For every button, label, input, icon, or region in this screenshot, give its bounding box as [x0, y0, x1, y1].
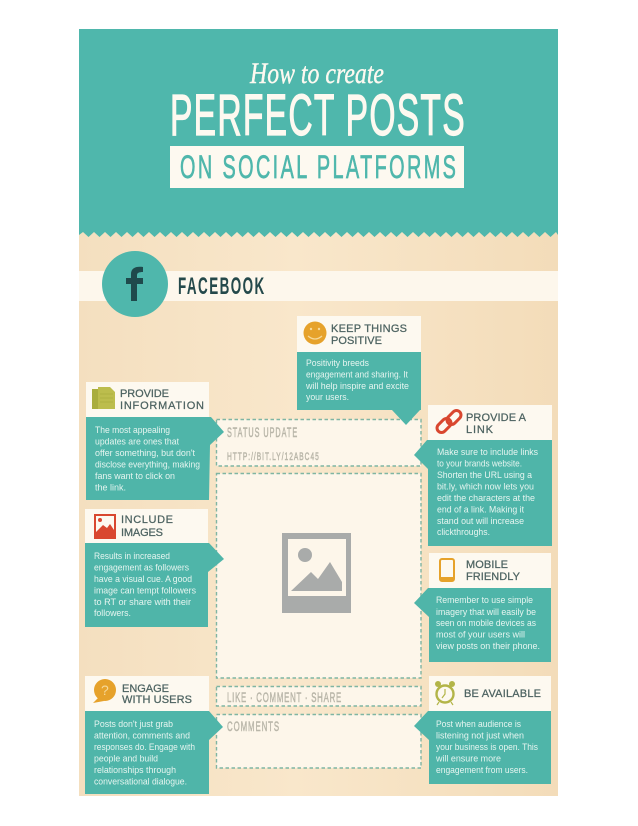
panel: provide a link: Make sure to include links: [437, 446, 538, 457]
panel: provide a link: edit the characters at the: [437, 492, 535, 503]
post mock: like comment share box: LIKE · COMMENT · SHARE: [227, 691, 342, 706]
panel: engage with users: people and build: [94, 752, 158, 764]
panel: be available: [414, 676, 551, 784]
panel: be available: your business is open. This: [436, 741, 538, 752]
panel: include images: to RT or share with their: [94, 596, 191, 607]
panel: provide a link: LINK: [466, 424, 494, 436]
panel: keep things positive: Positivity breeds: [306, 357, 369, 368]
panel: include images: [85, 509, 224, 627]
panel: mobile friendly: Remember to use simple: [436, 594, 533, 605]
panel: provide a link: clickthroughs.: [437, 526, 490, 537]
panel: mobile friendly: most of your users will: [436, 628, 525, 640]
facebook section heading: FACEBOOK: [178, 273, 264, 300]
panel: include images: Results in increased: [94, 550, 170, 561]
facebook section heading: [79, 251, 558, 317]
icon: chain link: [435, 409, 463, 434]
panel: include images: have a visual cue. A good: [94, 573, 192, 584]
title: How to create: How to create: [249, 57, 384, 90]
panel: provide a link: [414, 405, 552, 546]
panel: engage with users: ENGAGE: [122, 683, 169, 695]
icon: question bubble: ?: [101, 682, 109, 698]
panel: provide information: The most appealing: [95, 424, 170, 435]
panel: mobile friendly: imagery that will easily be: [436, 606, 536, 617]
panel: mobile friendly: [414, 553, 551, 662]
icon: documents: [92, 387, 115, 409]
panel: provide a link: bit.ly, which now lets you: [437, 480, 534, 492]
panel: provide information: PROVIDE: [120, 388, 169, 400]
panel: provide information: disclose everything, making: [95, 458, 200, 470]
icon: alarm clock: [435, 681, 455, 705]
icon: phone: [440, 559, 454, 581]
panel: include images: followers.: [94, 607, 131, 618]
panel: engage with users: [85, 676, 223, 794]
panel: engage with users: WITH USERS: [122, 694, 192, 706]
panel: engage with users: relationships through: [94, 764, 176, 775]
post mock: like comment share box: [216, 686, 421, 706]
panel: provide a link: to your brands website.: [437, 458, 522, 468]
panel: provide a link: Shorten the URL using a: [437, 469, 533, 480]
panel: include images: engagement as followers: [94, 562, 189, 572]
panel: engage with users: responses do. Engage with: [94, 741, 195, 752]
panel: keep things positive: your users.: [306, 391, 349, 402]
panel: keep things positive: [297, 316, 421, 425]
panel: be available: BE AVAILABLE: [464, 688, 541, 700]
panel: engage with users: attention, comments and: [94, 730, 190, 740]
panel: include images: INCLUDE: [121, 514, 173, 526]
title: Perfect Posts: PERFECT POSTS: [170, 84, 465, 148]
post mock: status update box: [216, 420, 421, 466]
panel: keep things positive: POSITIVE: [331, 335, 382, 347]
panel: provide information: offer something, but don't: [95, 447, 195, 458]
panel: be available: engagement from users.: [436, 764, 528, 775]
panel: keep things positive: will help inspire and excite: [305, 380, 409, 391]
panel: keep things positive: engagement and sharing. It: [306, 368, 408, 380]
panel: provide a link: PROVIDE A: [466, 412, 527, 424]
icon: red picture: [95, 515, 115, 538]
panel: engage with users: conversational dialogue.: [94, 776, 187, 786]
panel: provide information: updates are ones that: [95, 436, 179, 446]
icon: image placeholder: [282, 533, 351, 613]
post mock: comments box: [216, 714, 421, 768]
panel: be available: listening not just when: [436, 730, 524, 740]
panel: provide information: fans want to click on: [95, 470, 175, 481]
panel: mobile friendly: FRIENDLY: [466, 571, 521, 583]
panel: provide information: INFORMATION: [120, 400, 204, 412]
panel: provide information: the link.: [95, 482, 126, 492]
panel: include images: IMAGES: [121, 527, 163, 539]
icon: smiley: [304, 322, 326, 344]
subtitle: on social platforms: ON SOCIAL PLATFORMS: [180, 149, 456, 185]
header banner with zigzag edge: [79, 29, 558, 237]
beige background: [79, 228, 558, 796]
panel: be available: Post when audience is: [436, 718, 521, 729]
panel: be available: will ensure more: [435, 752, 501, 764]
panel: provide information: [86, 382, 224, 500]
post mock: image box: [216, 474, 421, 678]
panel: provide a link: end of a link. Making it: [437, 504, 524, 514]
panel: mobile friendly: seen on mobile devices as: [436, 617, 536, 628]
post mock: status update box: STATUS UPDATE: [227, 426, 297, 441]
panel: keep things positive: KEEP THINGS: [331, 323, 407, 335]
panel: mobile friendly: MOBILE: [466, 559, 508, 571]
panel: provide a link: stand out will increase: [437, 515, 524, 526]
panel: mobile friendly: view posts on their phone.: [436, 640, 540, 651]
panel: engage with users: Posts don't just grab: [94, 718, 173, 729]
post mock: status update box: HTTP://BIT.LY/12ABC45: [227, 450, 319, 462]
panel: include images: image can tempt followers: [94, 584, 196, 596]
post mock: comments box: COMMENTS: [227, 720, 279, 735]
